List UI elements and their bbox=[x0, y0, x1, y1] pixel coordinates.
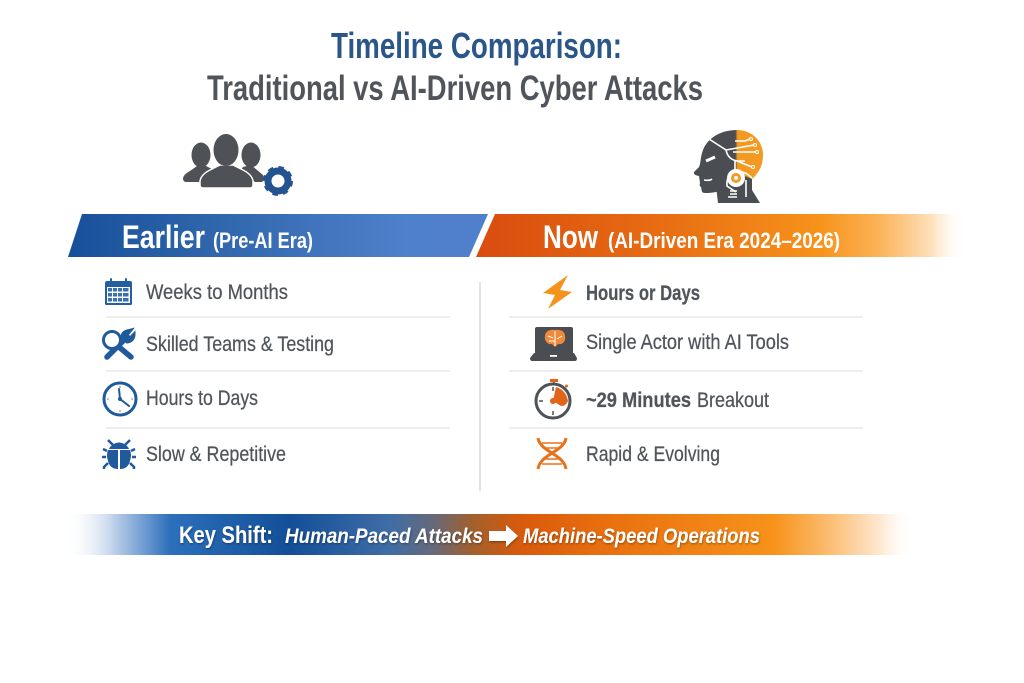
row: breakout time: ~29 Minutes bbox=[586, 389, 691, 412]
row: hours to days: Hours to Days bbox=[146, 387, 258, 410]
row: weeks to months: Weeks to Months bbox=[146, 281, 288, 304]
row: skilled teams bbox=[104, 330, 334, 357]
row: hours or days bbox=[543, 275, 700, 309]
row: slow and repetitive: Slow & Repetitive bbox=[146, 443, 286, 466]
title: Timeline Comparison: bbox=[331, 25, 622, 66]
icon: AI head bbox=[694, 130, 763, 203]
title bbox=[207, 25, 703, 108]
row: weeks to months bbox=[105, 279, 288, 305]
key shift banner: Key Shift: bbox=[179, 522, 273, 549]
banner: Now: (AI-Driven Era 2024–2026) bbox=[608, 228, 840, 253]
banner: Earlier: (Pre-AI Era) bbox=[213, 228, 313, 253]
key shift banner: Human-Paced Attacks bbox=[285, 525, 483, 548]
row: breakout time bbox=[536, 379, 769, 418]
banner: Earlier: Earlier bbox=[122, 219, 205, 255]
title: Traditional vs AI-Driven Cyber Attacks bbox=[207, 69, 703, 108]
row: skilled teams: Skilled Teams & Testing bbox=[146, 333, 334, 356]
key shift banner: Machine-Speed Operations bbox=[523, 525, 760, 548]
banner: Now: Now bbox=[543, 219, 598, 255]
row: breakout time: Breakout bbox=[697, 389, 769, 412]
row: hours or days: Hours or Days bbox=[586, 282, 700, 305]
row: single actor bbox=[530, 327, 789, 361]
row: slow and repetitive bbox=[102, 440, 286, 469]
row: rapid and evolving: Rapid & Evolving bbox=[586, 443, 720, 466]
row: single actor: Single Actor with AI Tools bbox=[586, 331, 789, 354]
panel: now list bbox=[530, 275, 789, 469]
banner: Earlier bbox=[68, 214, 488, 257]
row: rapid and evolving bbox=[538, 438, 720, 469]
row: hours to days bbox=[104, 383, 258, 415]
panel: earlier list bbox=[102, 279, 334, 469]
key shift banner bbox=[65, 514, 915, 555]
banner: Now bbox=[476, 214, 966, 257]
icon: team with gear bbox=[183, 134, 290, 194]
